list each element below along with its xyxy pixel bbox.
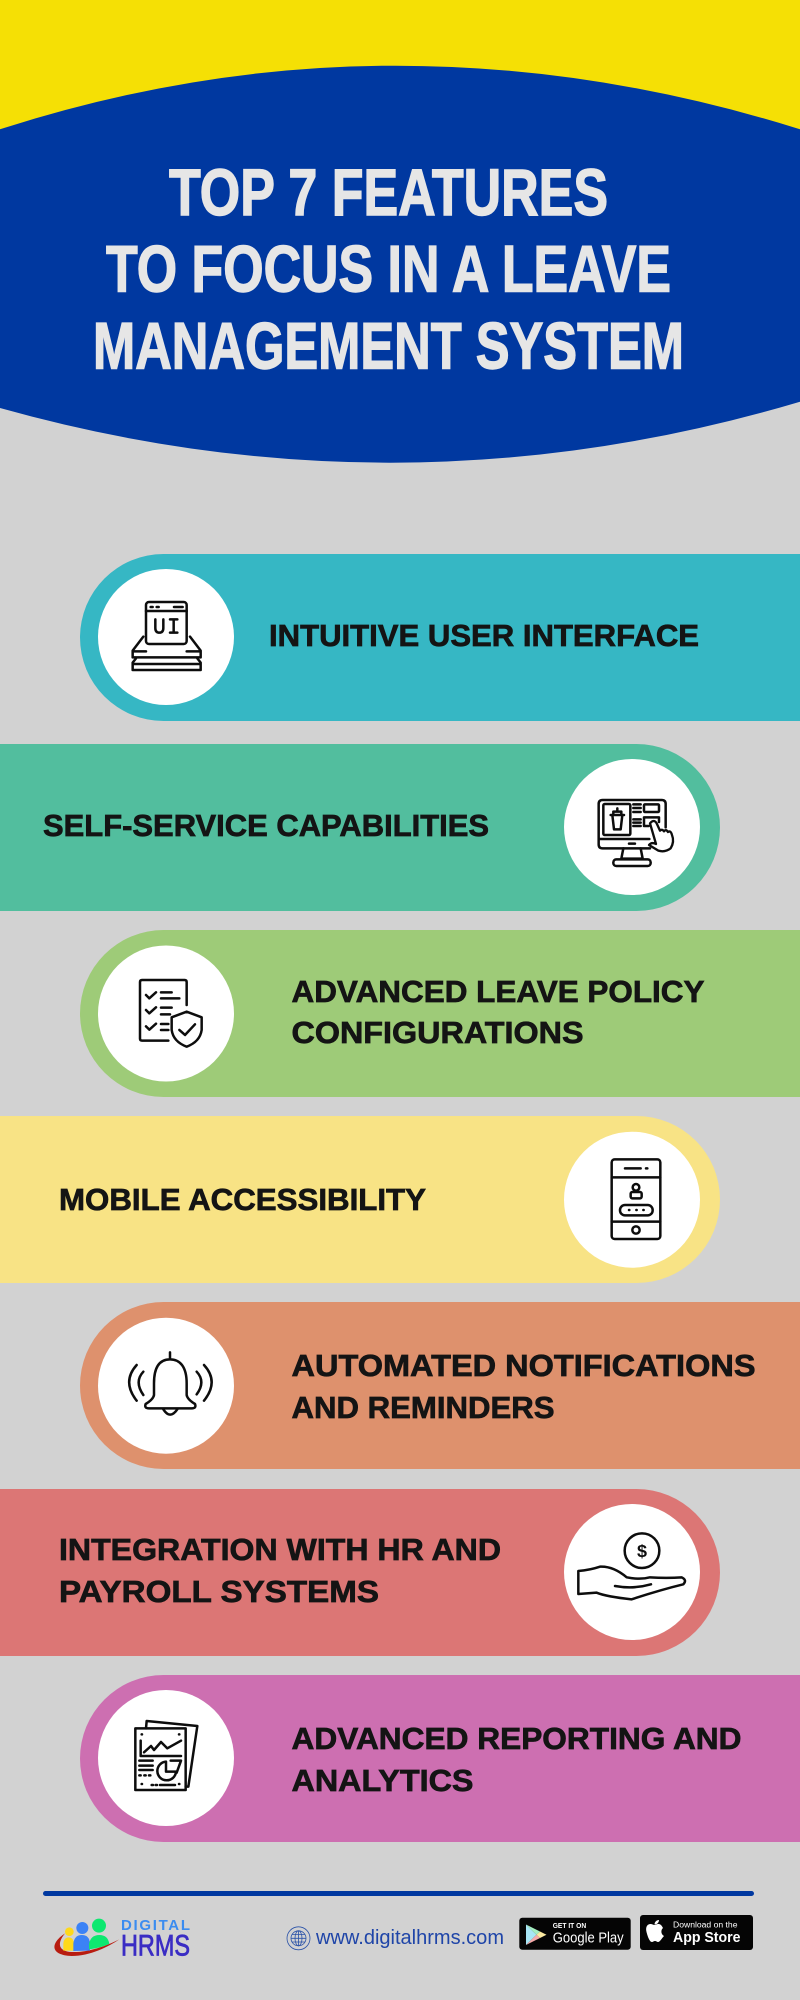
label: ADVANCED LEAVE POLICY <box>292 975 704 1009</box>
badge: App Store <box>640 1915 753 1950</box>
icon: UI window on stack <box>133 602 201 670</box>
website: www.digitalhrms.com <box>315 1927 504 1949</box>
label: MOBILE ACCESSIBILITY <box>59 1183 426 1217</box>
badge: App Store: Download on the <box>673 1920 738 1929</box>
badge: Google Play <box>519 1918 631 1950</box>
label: ANALYTICS <box>292 1764 474 1798</box>
title: TOP 7 FEATURES <box>169 155 608 229</box>
label <box>292 1349 756 1425</box>
badge: Google Play: GET IT ON <box>553 1923 586 1930</box>
label: AUTOMATED NOTIFICATIONS <box>292 1349 756 1383</box>
panel: advanced leave policy configurations <box>80 930 800 1097</box>
footer <box>43 1891 754 1962</box>
badge: Google Play: Google Play <box>553 1930 624 1947</box>
panel: mobile accessibility <box>0 1116 720 1283</box>
icon: monitor with touch <box>599 800 673 866</box>
label: PAYROLL SYSTEMS <box>59 1575 379 1609</box>
label: CONFIGURATIONS <box>292 1016 584 1050</box>
panel: automated notifications and reminders <box>80 1302 800 1469</box>
label: AND REMINDERS <box>292 1391 554 1425</box>
label <box>292 1722 742 1798</box>
panel: integration with HR and payroll <box>0 1489 720 1656</box>
label: INTUITIVE USER INTERFACE <box>269 619 699 653</box>
header banner <box>0 0 800 463</box>
label: INTEGRATION WITH HR AND <box>59 1533 501 1567</box>
icon: phone with login <box>612 1159 660 1239</box>
logo: Digital HRMS: DIGITAL <box>121 1917 190 1934</box>
icon: report sheets <box>135 1721 197 1790</box>
panel: advanced reporting and analytics <box>80 1675 800 1842</box>
badge: App Store: App Store <box>673 1929 740 1946</box>
panel: intuitive user interface <box>80 554 800 721</box>
label <box>292 975 704 1050</box>
title <box>93 155 684 383</box>
icon: checklist with shield <box>140 980 202 1047</box>
logo: Digital HRMS: HRMS <box>121 1930 190 1962</box>
icon: ringing bell <box>129 1352 212 1415</box>
icon: hand with coin: $ <box>637 1541 647 1561</box>
icon: globe <box>287 1927 310 1950</box>
panel: self-service capabilities <box>0 744 720 911</box>
label: SELF-SERVICE CAPABILITIES <box>43 809 489 843</box>
label <box>59 1533 501 1609</box>
icon: hand with coin <box>578 1533 685 1599</box>
label: ADVANCED REPORTING AND <box>292 1722 742 1756</box>
logo: Digital HRMS <box>54 1917 190 1962</box>
